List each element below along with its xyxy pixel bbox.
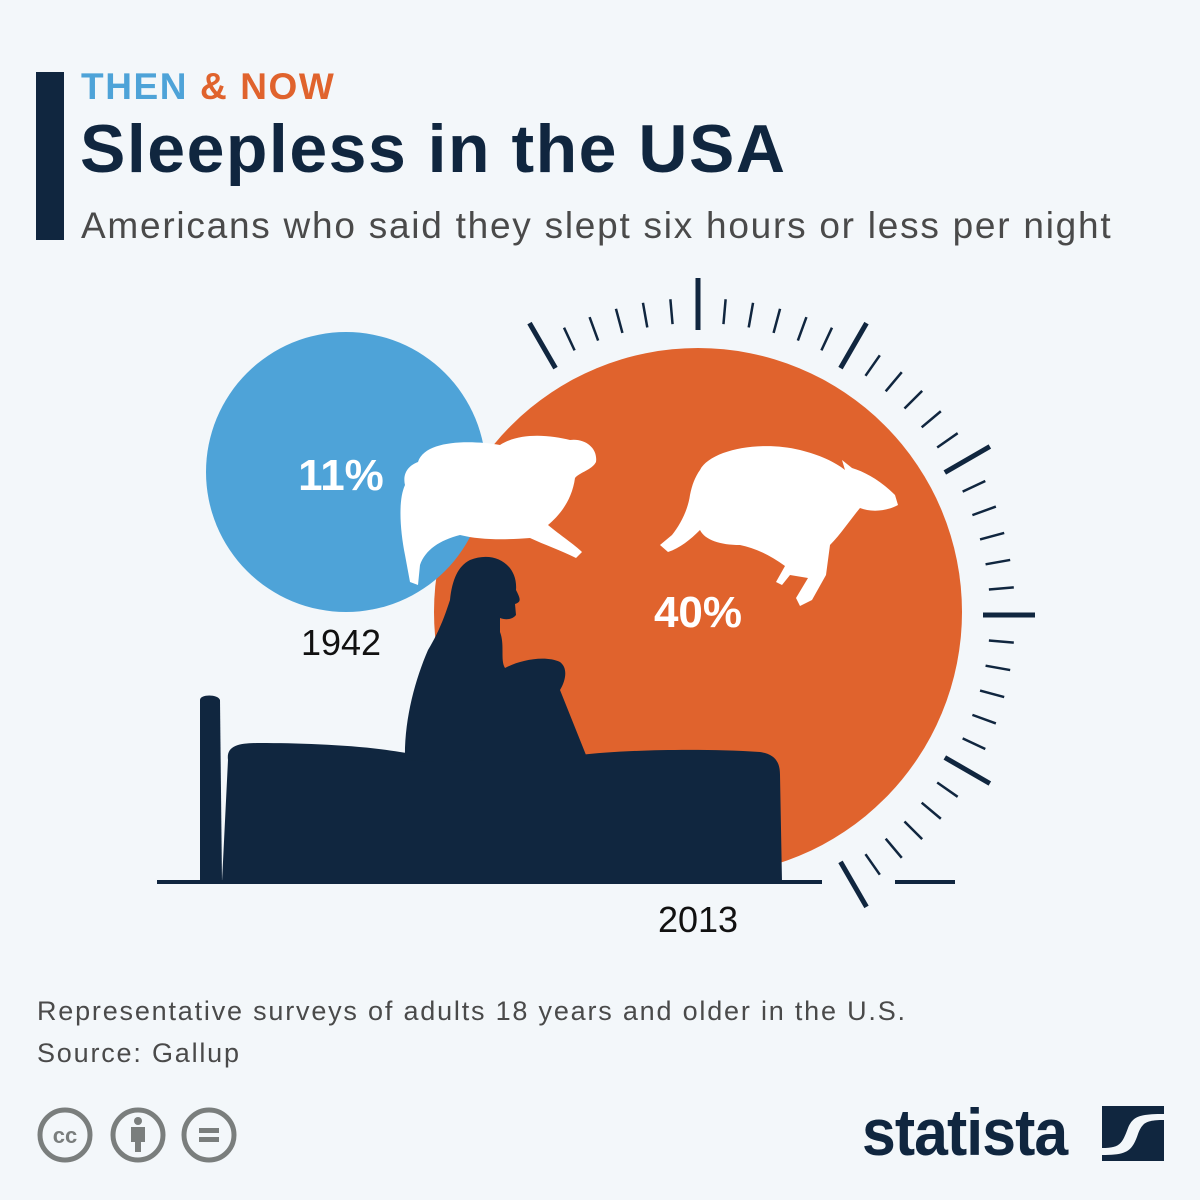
floor line — [157, 880, 955, 884]
logo: statista — [862, 1095, 1164, 1169]
footnote: Source: Gallup — [37, 1038, 241, 1068]
bubble: 1942 — [206, 332, 486, 612]
icon: sheep 2 — [660, 446, 898, 606]
label: 40%: 40% — [654, 588, 742, 637]
icons: creative commons — [38, 1108, 236, 1162]
label: 11%: 11% — [298, 451, 384, 500]
icon: sheep 1 — [400, 436, 596, 585]
icon: bed — [200, 696, 782, 882]
label: 2013: 2013 — [658, 899, 738, 940]
footnote: Representative surveys of adults 18 years and older in the U.S. — [37, 996, 907, 1026]
logo: statista: statista — [862, 1095, 1067, 1169]
icons: creative commons: cc — [53, 1123, 77, 1148]
bubble: 2013 — [434, 348, 962, 876]
subtitle: Americans who said they slept six hours or less per night — [81, 205, 1112, 246]
icon: woman silhouette — [405, 557, 588, 762]
title: Sleepless in the USA — [80, 111, 786, 187]
label: 1942: 1942 — [301, 622, 381, 663]
accent bar — [36, 72, 64, 240]
kicker: THEN & NOW — [81, 66, 335, 107]
footnote — [37, 996, 907, 1068]
clock ticks — [530, 278, 1035, 907]
